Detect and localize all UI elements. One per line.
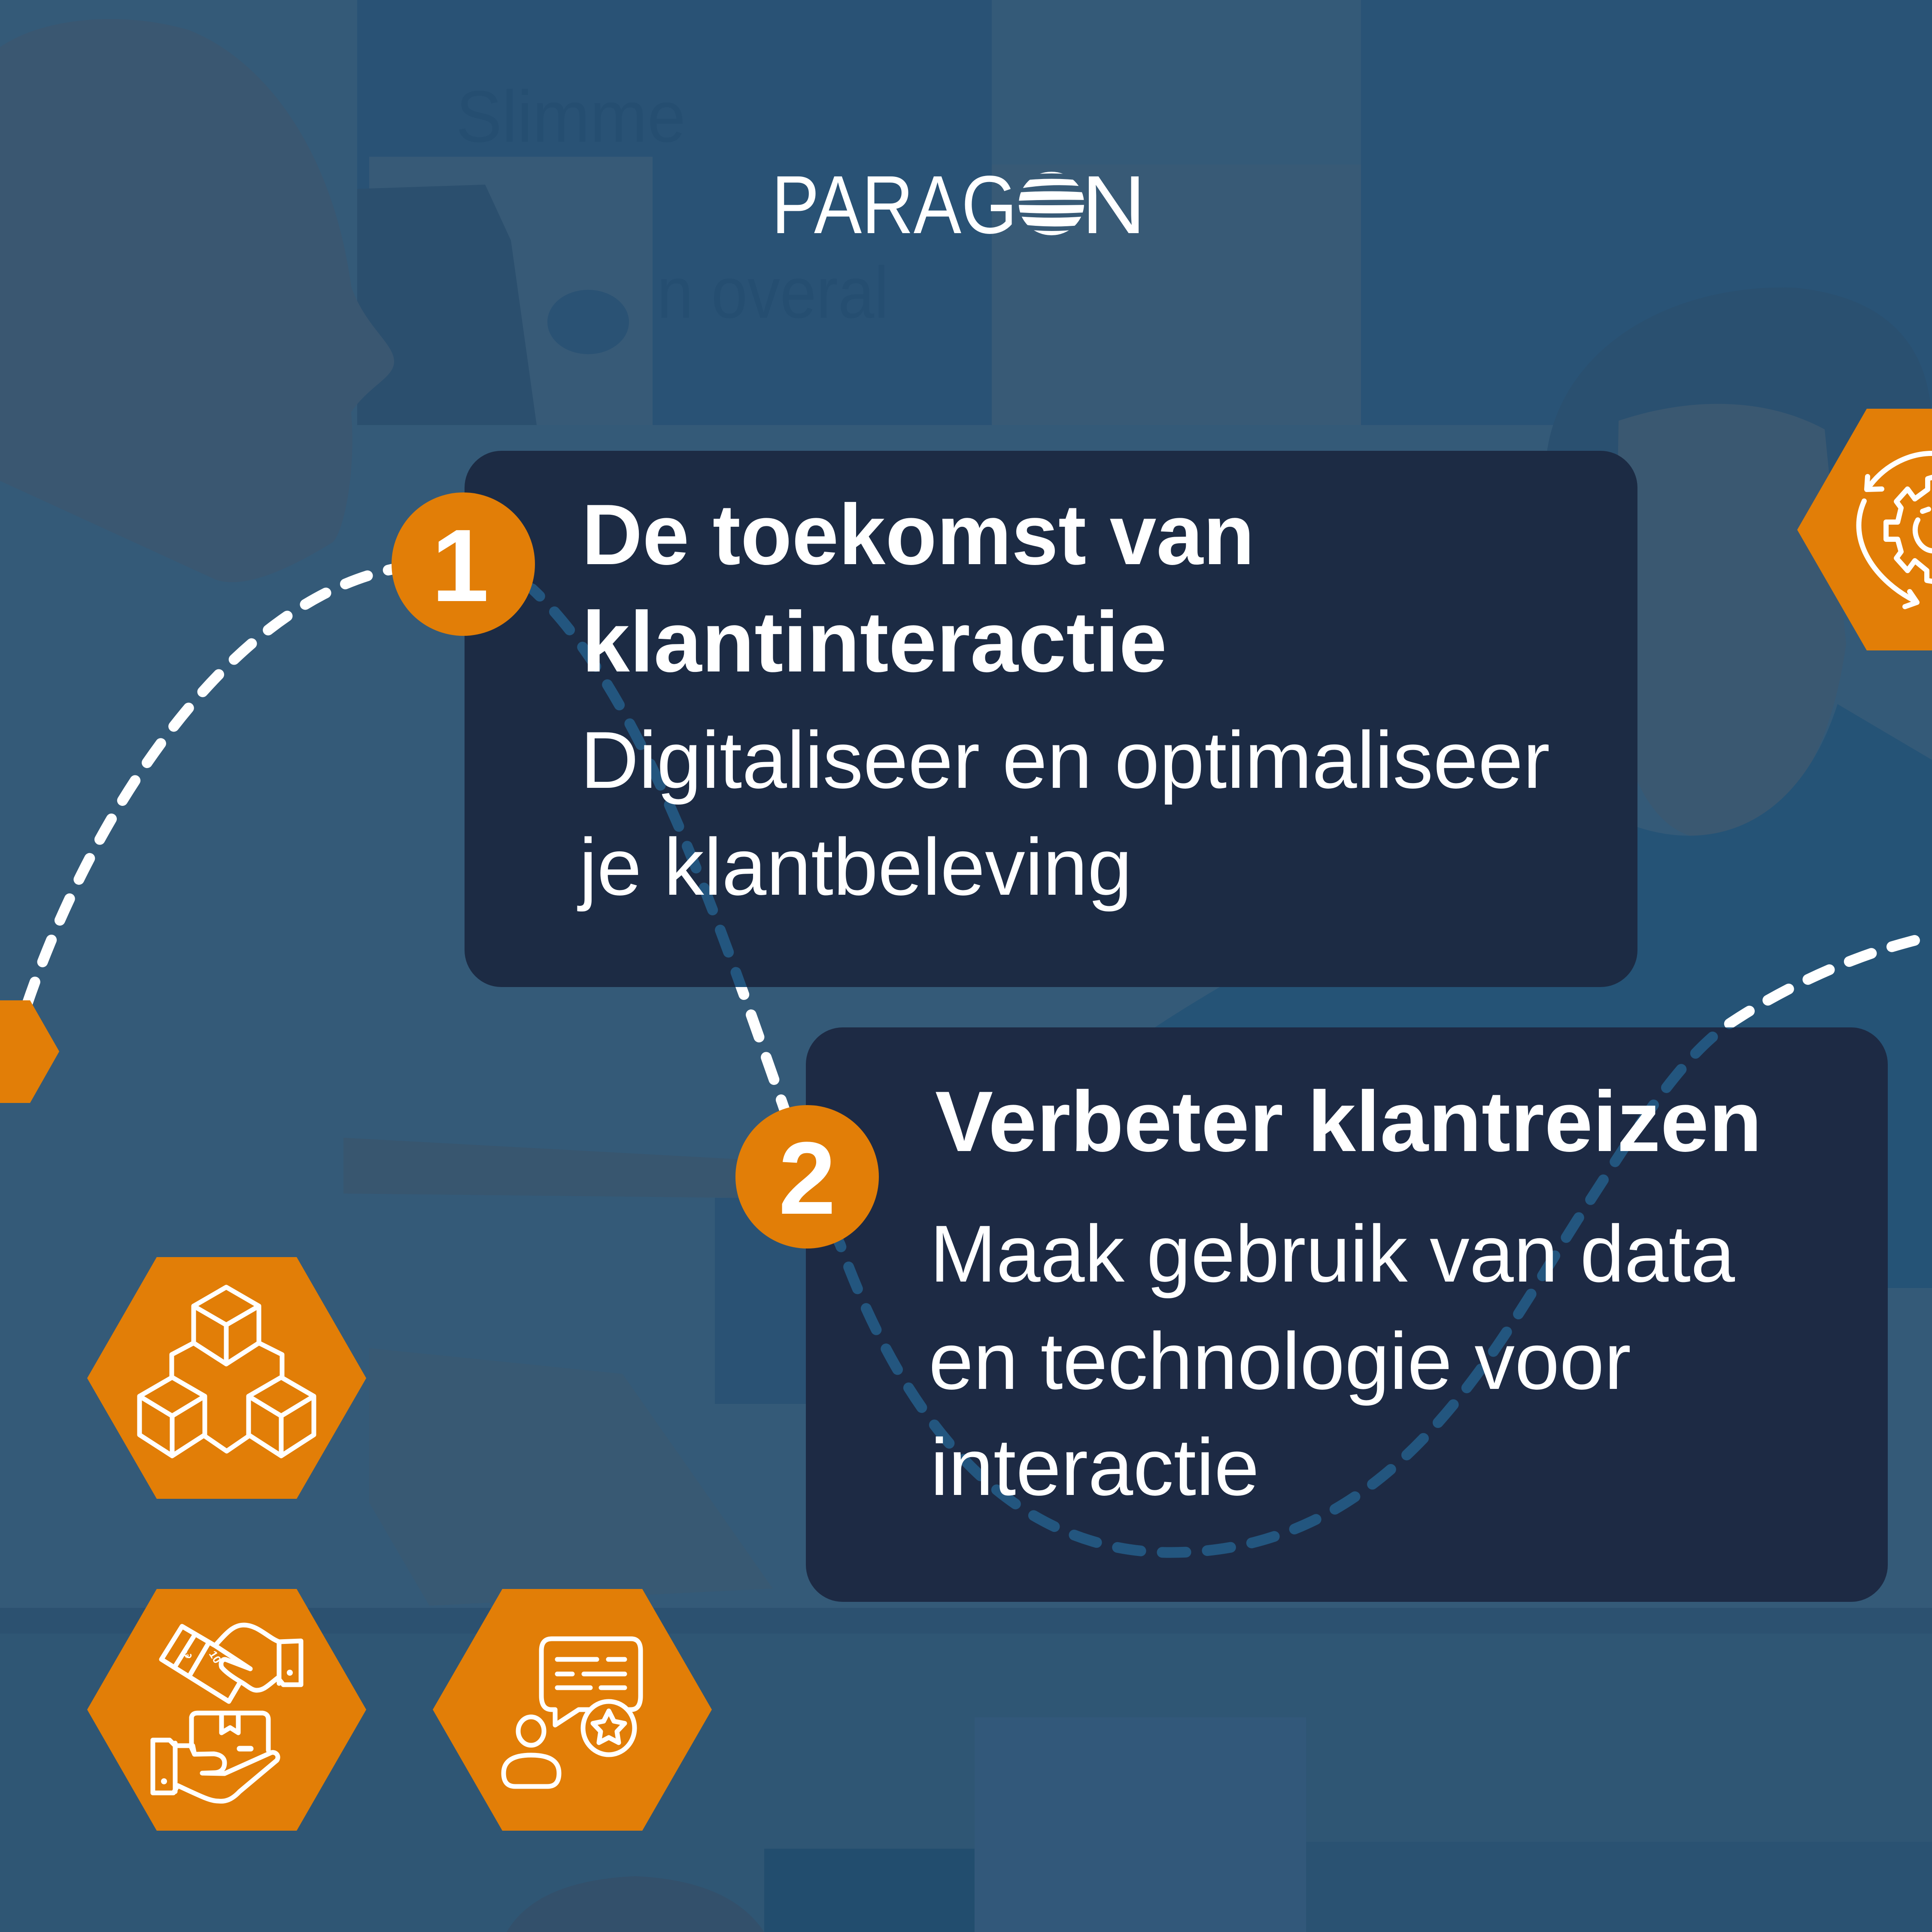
banknote: [161, 1626, 240, 1701]
logo: Paragon: [777, 172, 1139, 235]
bubble text lines: [557, 1659, 625, 1688]
package: [191, 1713, 268, 1754]
left partial hexagon: [0, 1000, 59, 1103]
faint poster lettering: Slimme: [456, 76, 686, 158]
icon: exchange hexagon: [87, 1589, 366, 1831]
speech bubble: [541, 1639, 641, 1725]
panel 2 background: [806, 1027, 1888, 1602]
panel 2 body text: Maak gebruik van data: [930, 1209, 1735, 1299]
panel 2 body text: en technologie voor: [929, 1316, 1631, 1406]
faint poster lettering: n overal: [657, 252, 889, 334]
right person shirt: [1138, 704, 1932, 1288]
right cube: [249, 1377, 314, 1456]
cuff dots: [161, 1670, 293, 1784]
top cube: [194, 1287, 259, 1364]
right person face: [1614, 404, 1846, 837]
lower hand: [153, 1740, 278, 1801]
logo: Paragon: N: [1081, 158, 1146, 251]
poster wall left: [357, 0, 992, 425]
left person head: [0, 19, 394, 582]
poster wall right: [1361, 0, 1932, 425]
panel 1 heading: klantinteractie: [582, 594, 1167, 690]
number badge 2: 2: [778, 1121, 836, 1236]
lower scene: [0, 1608, 1932, 1634]
number badge 1: 1: [431, 508, 489, 623]
panel 2 body text: [929, 1209, 1735, 1512]
icon: blocks hexagon: [87, 1257, 366, 1499]
logo globe: [1019, 172, 1084, 235]
banknote value: 10: [207, 1648, 224, 1666]
wall centre: [992, 164, 1361, 425]
number badge 2: [735, 1105, 879, 1249]
number badge 1: [392, 492, 535, 636]
panel 1 body text: Digitaliseer en optimaliseer: [580, 715, 1550, 805]
customer body: [504, 1755, 559, 1786]
customer head: [518, 1717, 544, 1745]
right person hair: [1546, 288, 1932, 515]
review badge: [583, 1701, 635, 1755]
panel 2 body text: interactie: [930, 1422, 1259, 1512]
faint poster lettering: [456, 76, 889, 334]
panel 2 heading: Verbeter klantreizen: [935, 1074, 1762, 1170]
icon: gear hexagon right: [1797, 409, 1932, 650]
table edge left: [343, 1138, 738, 1198]
panel 1 heading: De toekomst van: [582, 487, 1255, 583]
hand area: [369, 1348, 773, 1606]
logo: Paragon: PARAG: [772, 158, 1017, 251]
white dashed path: [27, 565, 1932, 1552]
upper hand: [215, 1625, 301, 1690]
banknote value: [180, 1648, 224, 1666]
panel 1 heading: [582, 487, 1255, 690]
panel 1 body text: je klantbeleving: [577, 822, 1132, 912]
banknote value: €: [180, 1649, 194, 1661]
blue dashed path inside panels: [529, 583, 1734, 1558]
star: [593, 1711, 625, 1743]
panel 1 body text: [577, 715, 1550, 912]
upper cuff: [276, 1642, 282, 1683]
icon: review hexagon: [433, 1589, 712, 1831]
panel 1 background: [465, 451, 1637, 987]
poster leaf detail: [547, 290, 629, 354]
cube connectors: [172, 1343, 282, 1451]
left cube: [140, 1377, 205, 1456]
